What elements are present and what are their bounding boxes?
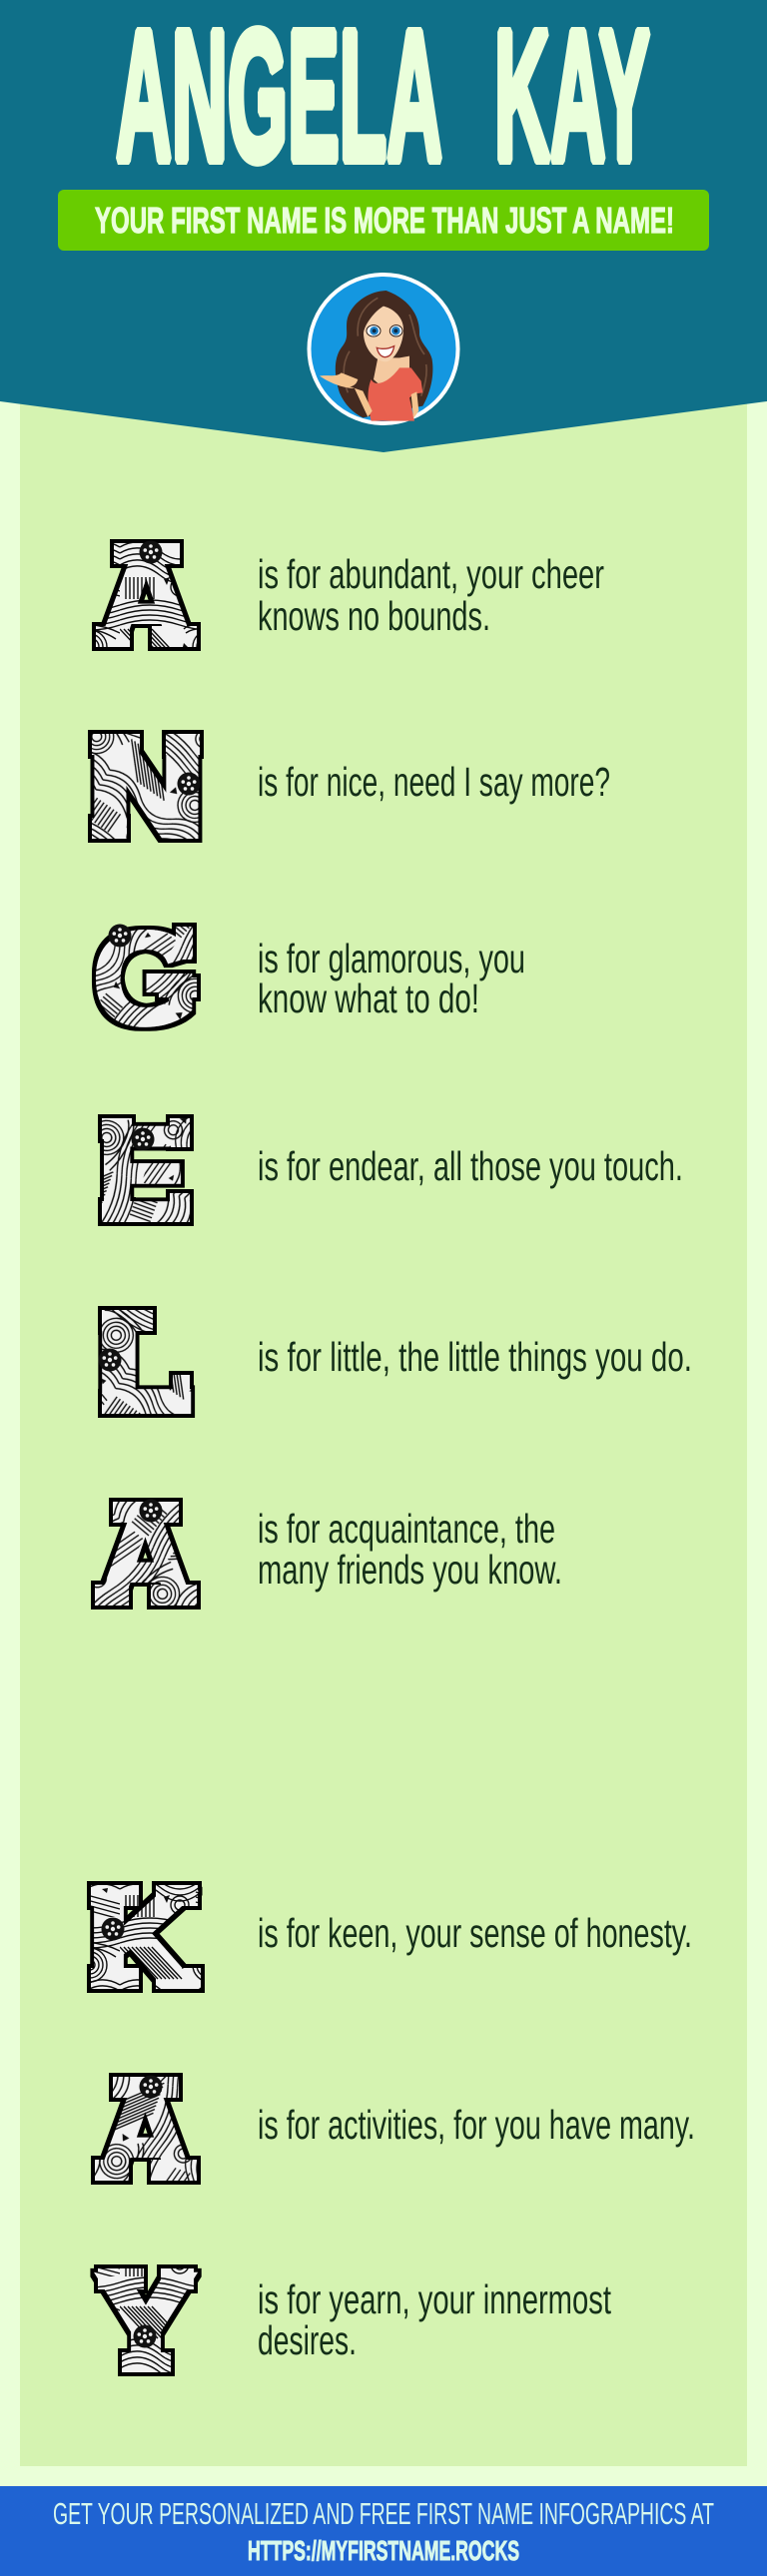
letter K: K: [89, 1866, 193, 2013]
face: [364, 307, 403, 361]
letter E: E: [98, 1100, 190, 1247]
avatar: woman in a circle: [310, 275, 457, 423]
text: acquaintance: is for acquaintance, the: [258, 1506, 555, 1552]
row 6: letter A: [95, 1484, 562, 1630]
row 3: letter G: [93, 905, 525, 1051]
row 2: letter N: [90, 715, 610, 862]
letter L: L: [98, 1290, 190, 1437]
arms and hand: [320, 372, 418, 418]
content panel: [20, 379, 747, 2466]
hair: [336, 291, 432, 417]
text: yearn: [258, 2276, 611, 2363]
letter A: A: [98, 2059, 193, 2206]
row 7: letter K: [89, 1866, 692, 2013]
text: yearn: is for yearn, your innermost: [258, 2276, 611, 2322]
letter A: A: [99, 525, 194, 672]
text: abundant: is for abundant, your cheer: [258, 551, 604, 597]
letter G: G: [93, 905, 198, 1051]
text: abundant: knows no bounds.: [258, 593, 490, 639]
letter Y: Y: [101, 2249, 191, 2395]
text: glamorous: know what to do!: [258, 975, 479, 1021]
footer: [0, 2486, 767, 2576]
eyes: [367, 325, 402, 336]
row 9: letter Y: [98, 2249, 611, 2395]
text: yearn: desires.: [258, 2317, 357, 2363]
footer line 2: HTTPS://MYFIRSTNAME.ROCKS: [248, 2535, 519, 2566]
text: acquaintance: [258, 1506, 562, 1593]
row 4: letter E: [98, 1100, 683, 1247]
smile: [377, 346, 394, 357]
letter A: A: [98, 1484, 193, 1630]
letter N: N: [90, 715, 203, 862]
text: glamorous: is for glamorous, you: [258, 936, 525, 981]
text: glamorous: [258, 936, 525, 1021]
tagline bar: [58, 190, 709, 251]
header banner: [0, 0, 767, 452]
text: nice: is for nice, need I say more?: [258, 759, 610, 805]
row 8: letter A: [95, 2059, 695, 2206]
text: abundant: [258, 551, 604, 639]
hair highlights: [344, 298, 426, 396]
neck: [374, 356, 409, 387]
row 1: letter A: [96, 525, 604, 672]
row 5: letter L: [98, 1290, 692, 1437]
text: acquaintance: many friends you know.: [258, 1547, 562, 1593]
shirt: [369, 367, 422, 421]
